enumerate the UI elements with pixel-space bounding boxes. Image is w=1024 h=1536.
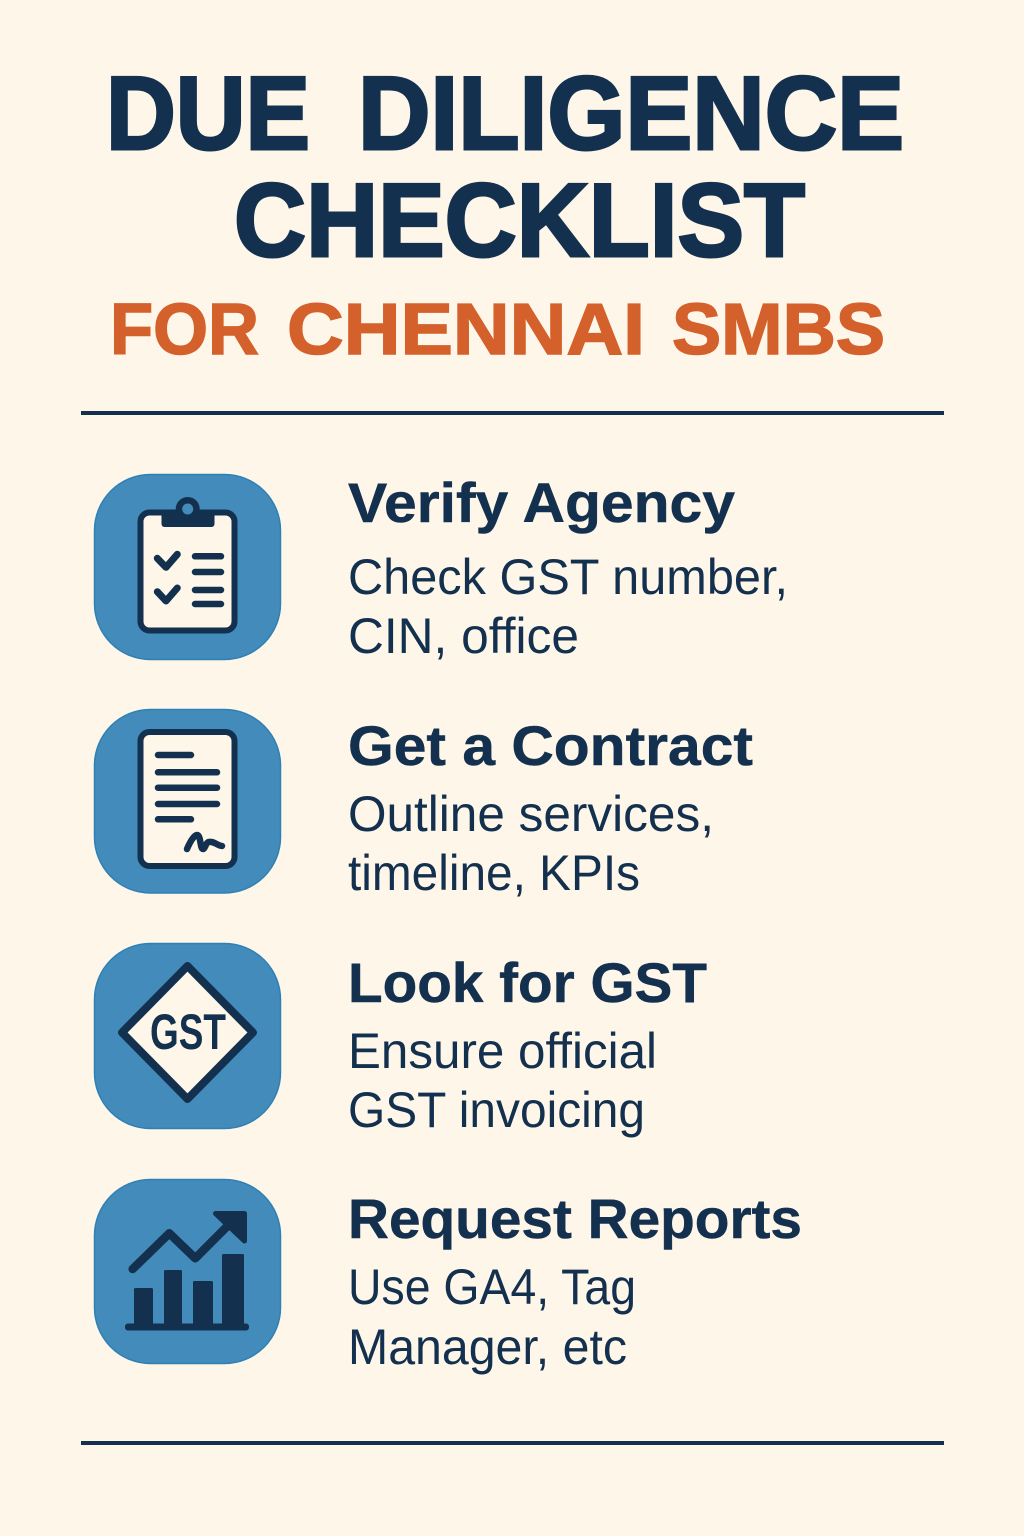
description bbox=[348, 549, 788, 664]
description: Manager, etc bbox=[348, 1319, 627, 1375]
title: DILIGENCE bbox=[358, 56, 904, 172]
icon: signed document bbox=[94, 710, 280, 893]
subtitle: SMBS bbox=[672, 290, 885, 370]
icon: growth chart bbox=[94, 1180, 280, 1364]
checklist item: get a contract bbox=[94, 710, 753, 901]
icon: gst diamond bbox=[94, 944, 280, 1128]
heading: Get a Contract bbox=[348, 714, 753, 777]
icon: gst diamond: GST bbox=[150, 1004, 226, 1060]
heading: Look for GST bbox=[348, 951, 707, 1014]
description bbox=[348, 1023, 657, 1138]
description: timeline, KPIs bbox=[348, 845, 640, 901]
description: Ensure official bbox=[348, 1023, 657, 1079]
title: CHECKLIST bbox=[234, 163, 805, 279]
description bbox=[348, 1259, 636, 1375]
subtitle: CHENNAI bbox=[287, 290, 645, 370]
title: DUE bbox=[106, 56, 310, 172]
heading: Request Reports bbox=[348, 1187, 802, 1250]
icon: clipboard bbox=[94, 474, 280, 660]
description bbox=[348, 786, 714, 901]
description: Outline services, bbox=[348, 786, 714, 842]
description: Check GST number, bbox=[348, 549, 788, 605]
subtitle: FOR bbox=[110, 290, 259, 370]
heading: Verify Agency bbox=[348, 471, 735, 534]
subtitle bbox=[110, 290, 885, 370]
title bbox=[106, 56, 904, 279]
checklist item: verify agency bbox=[94, 471, 788, 664]
description: Use GA4, Tag bbox=[348, 1259, 636, 1315]
description: GST invoicing bbox=[348, 1082, 645, 1138]
checklist item: look for gst bbox=[94, 944, 707, 1138]
checklist item: request reports bbox=[94, 1180, 802, 1375]
description: CIN, office bbox=[348, 608, 579, 664]
